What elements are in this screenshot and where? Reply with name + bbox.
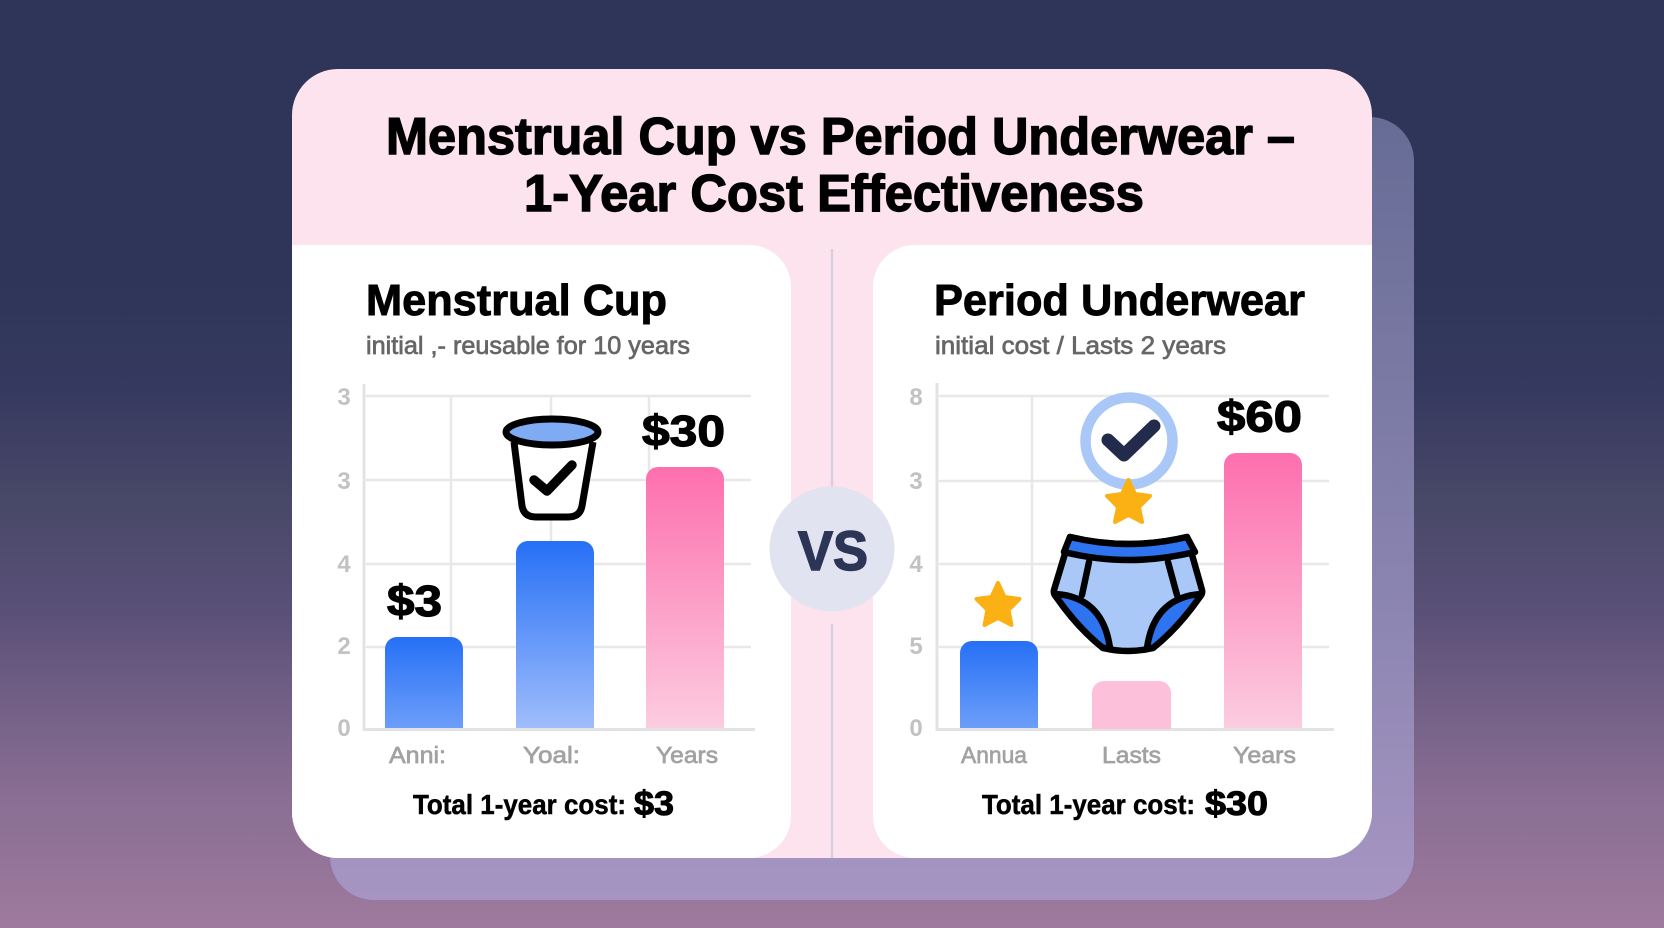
icon: period underwear <box>1054 537 1202 651</box>
total cost: period underwear: Total 1-year cost: <box>982 789 1195 820</box>
bar chart: menstrual cup: Anni: <box>389 742 446 768</box>
bar chart: menstrual cup: 0 <box>337 715 351 742</box>
bar chart: menstrual cup: Yoal: <box>523 742 580 768</box>
bar chart: period underwear: Lasts <box>1102 742 1161 768</box>
bar chart: menstrual cup: 3 <box>337 384 351 411</box>
total cost: menstrual cup: $3 <box>634 785 674 823</box>
bar chart: menstrual cup <box>337 384 755 768</box>
main card with title band <box>292 69 1372 858</box>
icon: star above underwear <box>1107 480 1150 522</box>
total cost: period underwear <box>982 785 1268 823</box>
bar chart: period underwear: 0 <box>909 715 923 742</box>
bar chart: menstrual cup: Years <box>656 742 718 768</box>
title <box>386 108 1295 223</box>
heading: menstrual cup: Menstrual Cup <box>366 276 667 325</box>
bar chart: period underwear: 5 <box>909 633 923 660</box>
panel: period underwear <box>873 245 1372 858</box>
bar chart: menstrual cup: 3 <box>337 468 351 495</box>
bar chart: period underwear: 4 <box>909 551 923 578</box>
title: 1-Year Cost Effectiveness <box>524 165 1144 223</box>
bar chart: period underwear: 3 <box>909 468 923 495</box>
heading: period underwear: Period Underwear <box>934 276 1305 325</box>
total cost: menstrual cup: Total 1-year cost: <box>413 789 626 820</box>
panel: menstrual cup <box>292 245 791 858</box>
bar chart: menstrual cup: $3 <box>387 577 442 626</box>
vs badge: VS <box>798 519 868 582</box>
bar chart: period underwear: Years <box>1233 742 1296 768</box>
bar chart: menstrual cup: 2 <box>337 633 351 660</box>
vs badge <box>770 486 894 612</box>
total cost: period underwear: $30 <box>1205 785 1268 823</box>
icon: cup with check <box>506 419 598 517</box>
bar chart: period underwear: 8 <box>909 384 923 411</box>
bar chart: period underwear <box>909 383 1334 768</box>
centre divider <box>831 249 833 858</box>
bar chart: menstrual cup: 4 <box>337 551 351 578</box>
bar chart: menstrual cup: $30 <box>642 407 725 456</box>
bar chart: period underwear: Annua <box>961 742 1027 768</box>
icon: check badge <box>1086 398 1172 484</box>
title: Menstrual Cup vs Period Underwear – <box>386 108 1295 166</box>
subheading: initial cost / Lasts 2 years <box>935 332 1226 360</box>
back card <box>330 117 1414 900</box>
subheading: initial ,- reusable for 10 years <box>366 332 690 360</box>
bar chart: period underwear: $60 <box>1217 392 1302 442</box>
icon: star above bar <box>976 583 1020 625</box>
